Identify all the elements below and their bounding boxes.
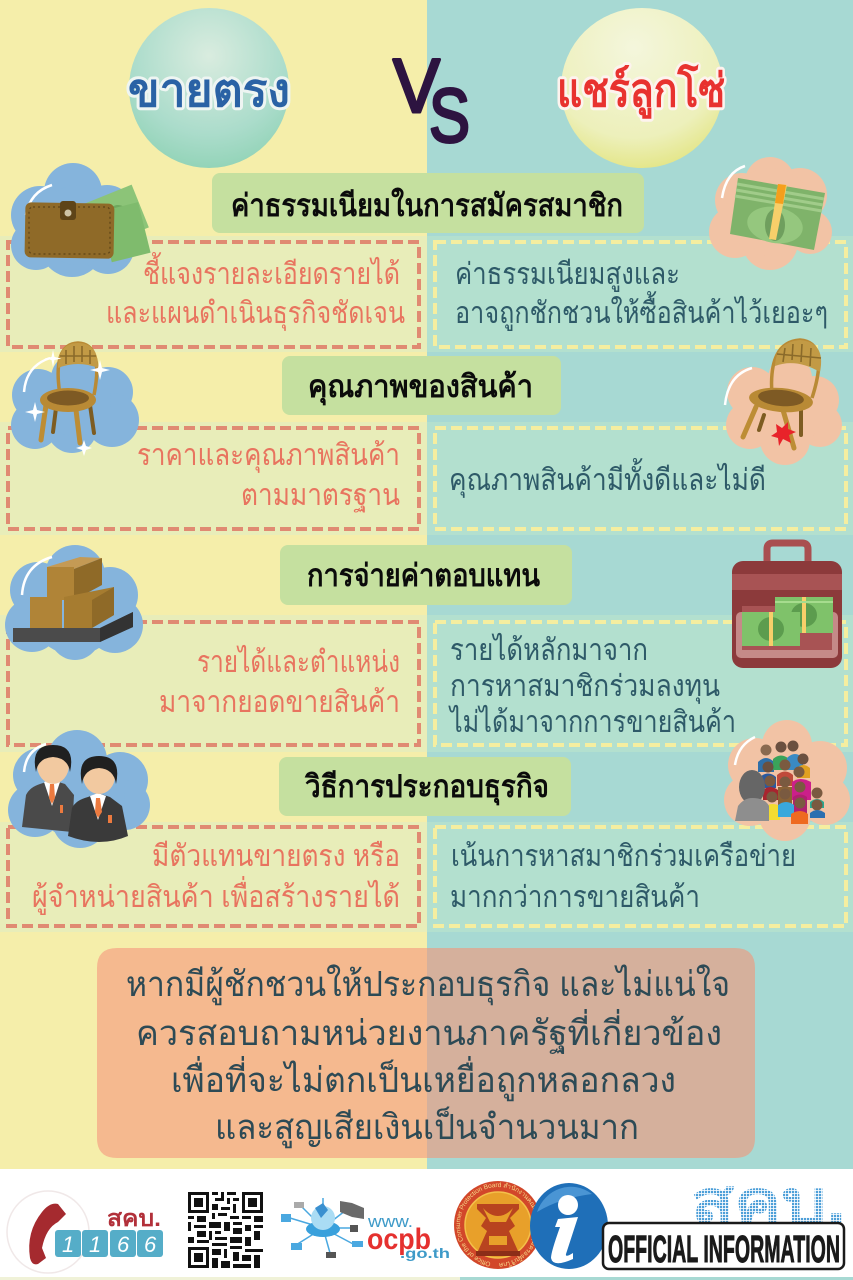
text: direct selling compensation bbox=[159, 644, 400, 719]
text: pyramid fee: ค่าธรรมเนียมสูงและ bbox=[455, 258, 680, 292]
text: pyramid compensation: การหาสมาชิกร่วมลงทุน bbox=[450, 670, 720, 705]
text: direct selling method: ผู้จำหน่ายสินค้า เพื่อสร้างรายได้ bbox=[32, 876, 400, 915]
text: direct selling quality: ตามมาตรฐาน bbox=[241, 479, 400, 513]
text: direct selling method bbox=[32, 840, 400, 915]
title: VS bbox=[393, 44, 470, 159]
circle: pyramid scheme title bubble bbox=[561, 8, 723, 168]
text: direct selling method: มีตัวแทนขายตรง หรือ bbox=[152, 840, 400, 873]
callout: advice: หากมีผู้ชักชวนให้ประกอบธุรกิจ และไม่แน่ใจ bbox=[126, 964, 730, 1005]
icon: crowd on peach cloud bbox=[724, 720, 850, 841]
text: direct selling fee: ชี้แจงรายละเอียดรายได้ bbox=[143, 252, 400, 291]
callout: advice: และสูญเสียเงินเป็นจำนวนมาก bbox=[215, 1106, 639, 1148]
panel: row 4 business method bbox=[0, 757, 853, 932]
text: pyramid method: เน้นการหาสมาชิกร่วมเครือข่าย bbox=[451, 840, 796, 873]
text: pyramid compensation: รายได้หลักมาจาก bbox=[450, 632, 648, 667]
text: direct selling quality: ราคาและคุณภาพสินค้า bbox=[137, 439, 400, 474]
callout: advice bbox=[97, 948, 755, 1158]
circle: direct selling title bubble bbox=[129, 8, 289, 168]
callout: advice: เพื่อที่จะไม่ตกเป็นเหยื่อถูกหลอกลวง bbox=[171, 1056, 676, 1101]
text: pyramid method: มากกว่าการขายสินค้า bbox=[450, 881, 700, 914]
icon: info i bbox=[530, 1183, 608, 1269]
icon: two salesmen on blue cloud bbox=[8, 730, 150, 848]
icon: wallet with money on blue cloud bbox=[11, 163, 151, 277]
text: pyramid compensation: ไม่ได้มาจากการขายสินค้า bbox=[448, 704, 736, 739]
heading: compensation bbox=[280, 545, 572, 605]
icon: ocpb website network globe: ocpb bbox=[367, 1223, 431, 1256]
text: pyramid quality: คุณภาพสินค้ามีทั้งดีและไม่ดี bbox=[449, 458, 766, 499]
title: VS: V bbox=[393, 44, 440, 129]
panel: row 2 product quality bbox=[0, 356, 853, 535]
icon: ocpb website network globe bbox=[281, 1198, 450, 1261]
heading: membership fee: ค่าธรรมเนียมในการสมัครสมาชิก bbox=[231, 187, 623, 223]
text: pyramid fee bbox=[455, 258, 828, 331]
heading: business method bbox=[279, 757, 571, 816]
text: pyramid method bbox=[450, 840, 796, 914]
icon: 1166 hotline phone: สคบ. bbox=[107, 1205, 161, 1231]
icon: dotted blue OCPB letters: สคบ. bbox=[691, 1170, 846, 1235]
icon: red suitcase with money bbox=[732, 543, 842, 668]
icon: QR code bbox=[188, 1192, 263, 1268]
heading: compensation: การจ่ายค่าตอบแทน bbox=[307, 558, 540, 593]
icon: 1166 hotline phone: 6 bbox=[117, 1232, 130, 1257]
text: direct selling fee: และแผนดำเนินธุรกิจชัดเจน bbox=[106, 297, 405, 332]
text: direct selling compensation: มาจากยอดขายสินค้า bbox=[159, 686, 400, 719]
text: pyramid compensation bbox=[448, 632, 736, 739]
heading: product quality: คุณภาพของสินค้า bbox=[308, 369, 533, 406]
icon: shiny chair on blue cloud bbox=[11, 343, 139, 456]
title: pyramid scheme: แชร์ลูกโซ่ bbox=[557, 63, 725, 119]
icon: ocpb website network globe: .go.th bbox=[400, 1245, 450, 1261]
title: VS: S bbox=[429, 74, 470, 159]
panel: row 3 compensation bbox=[0, 545, 853, 752]
text: direct selling compensation: รายได้และตำแหน่ง bbox=[197, 644, 400, 679]
heading: business method: วิธีการประกอบธุรกิจ bbox=[304, 769, 549, 806]
icon: boxes on platform on blue cloud bbox=[5, 545, 143, 660]
icon: 1166 hotline phone: 1 bbox=[62, 1232, 74, 1257]
icon: 1166 hotline phone: 1 bbox=[89, 1232, 101, 1257]
icon: 1166 hotline phone bbox=[7, 1191, 163, 1273]
text: direct selling quality bbox=[137, 439, 400, 513]
panel: row 1 membership fee bbox=[0, 173, 853, 352]
text: direct selling fee bbox=[106, 252, 405, 332]
icon: 1166 hotline phone: 6 bbox=[144, 1232, 157, 1257]
icon: broken chair on peach cloud bbox=[725, 340, 842, 465]
icon: OCPB seal: Office of the Consumer Protection Board สำนักงานคณะกรรมการคุ้มครองผู้บริโภค bbox=[456, 1182, 535, 1268]
heading: membership fee bbox=[212, 173, 644, 233]
heading: product quality bbox=[282, 356, 561, 415]
title: direct selling: ขายตรง bbox=[128, 64, 290, 116]
callout: advice: ควรสอบถามหน่วยงานภาครัฐที่เกี่ยวข้อง bbox=[136, 1009, 722, 1054]
icon: stack of money on peach cloud bbox=[709, 157, 832, 270]
panel: footer bbox=[0, 1169, 853, 1274]
icon: ocpb website network globe: www. bbox=[367, 1212, 413, 1231]
